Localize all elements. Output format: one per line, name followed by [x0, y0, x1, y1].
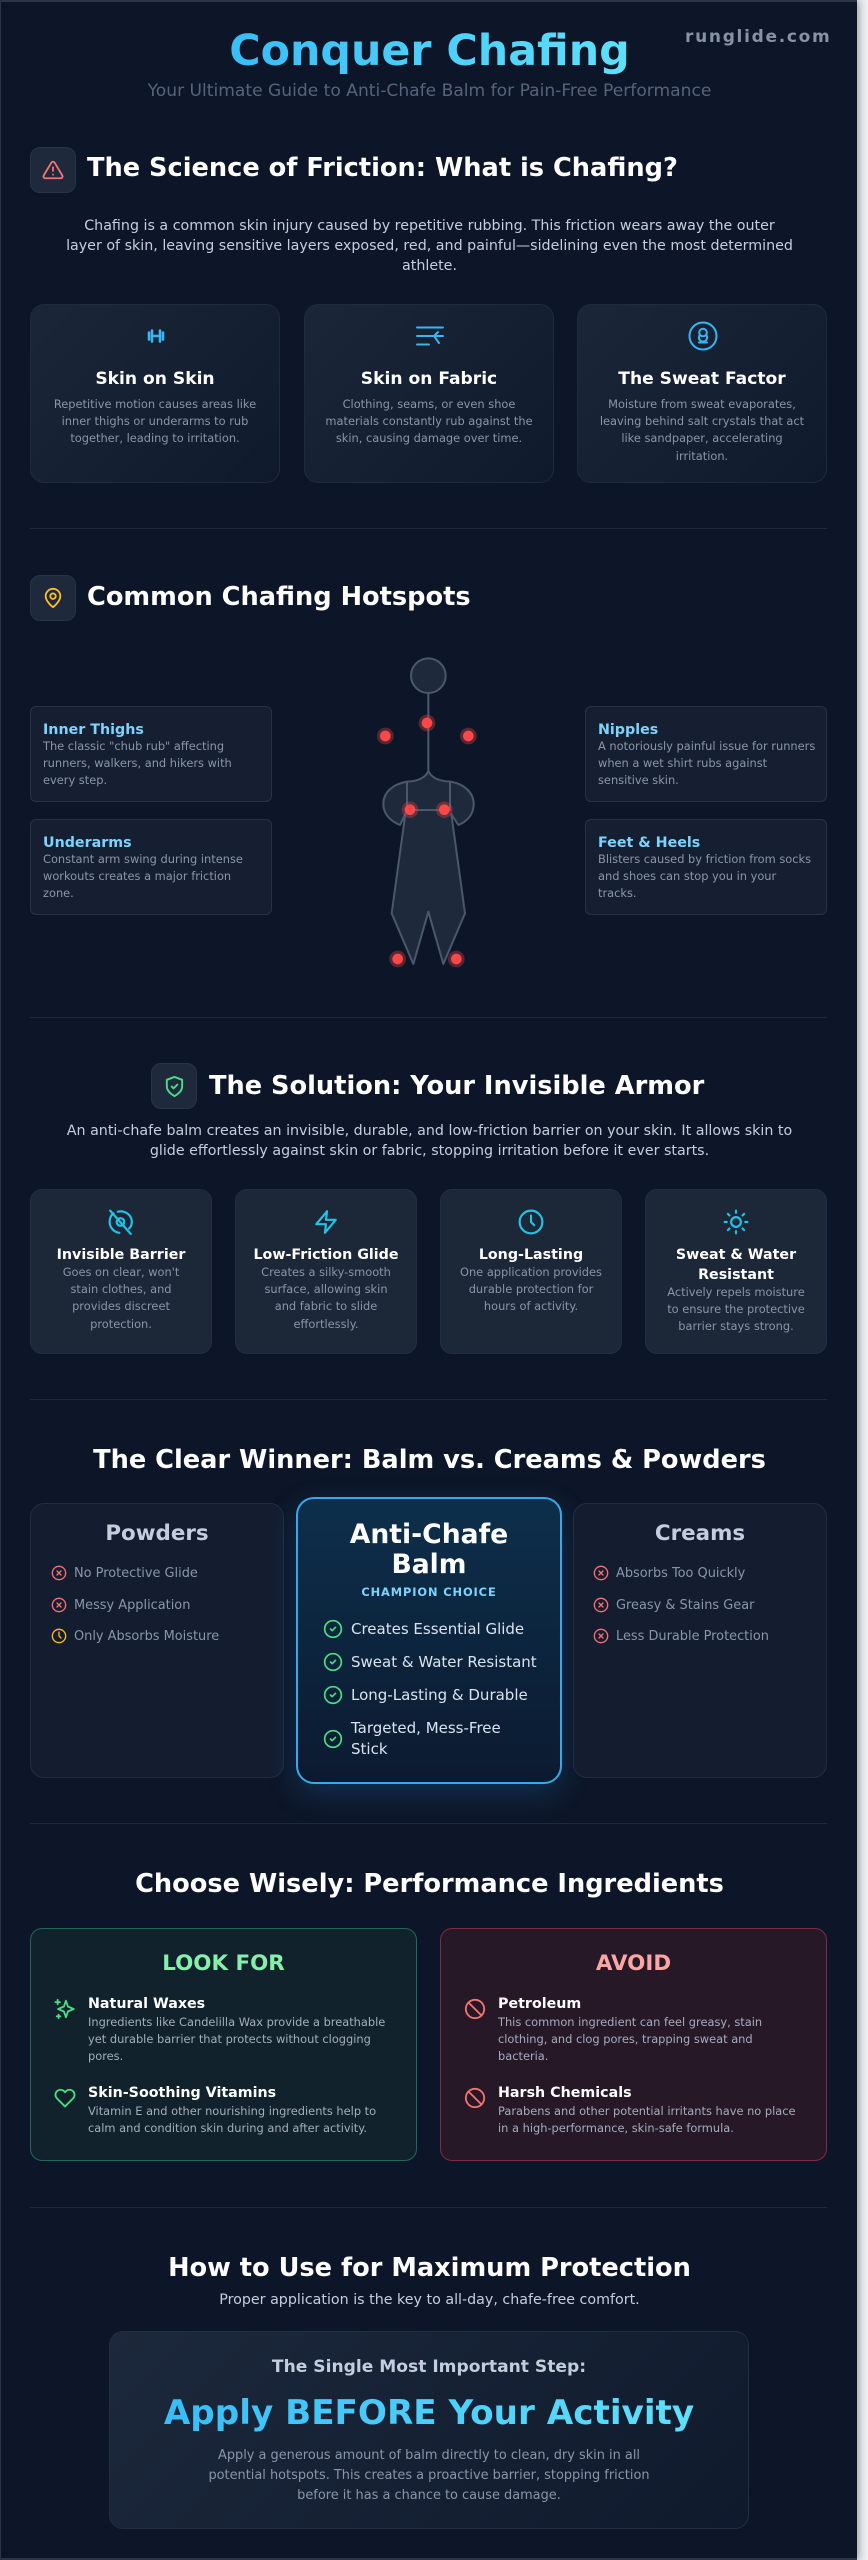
icon: eye off: [108, 1210, 133, 1235]
hotspot description: zone.: [43, 886, 74, 900]
ingredient title: Skin-Soothing Vitamins: [88, 2084, 276, 2100]
row: sweat and water resistant: Sweat & Water Resistant: [351, 1653, 537, 1671]
ingredient description: clothing, and clog pores, trapping sweat and: [498, 2032, 753, 2046]
step label: The Single Most Important Step:: [272, 2357, 586, 2377]
icon: warning triangle: [30, 147, 76, 193]
icon: clock: [518, 1210, 544, 1234]
card: invisible barrier: [30, 1189, 212, 1354]
ingredient description: pores.: [88, 2049, 123, 2063]
ingredient description: [88, 2104, 376, 2135]
card description: skin, causing damage over time.: [336, 431, 522, 445]
panel title: Creams: [655, 1521, 745, 1546]
panel: powders: [30, 1503, 284, 1778]
panel: creams: [573, 1503, 827, 1778]
intro paragraph: layer of skin, leaving sensitive layers exposed, red, and painful—sidelining even the most determined: [66, 238, 793, 254]
solution paragraph: [66, 1123, 792, 1159]
panel title: [350, 1519, 508, 1580]
panel title: Powders: [105, 1521, 209, 1546]
card title: Low-Friction Glide: [253, 1247, 399, 1263]
heading: hotspots: Common Chafing Hotspots: [87, 582, 471, 612]
solution paragraph: glide effortlessly against skin or fabric, stopping irritation before it ever starts.: [150, 1143, 709, 1159]
ingredient: harsh chemicals: [498, 2082, 796, 2137]
card: the sweat factor: [577, 304, 827, 483]
row: absorbs too quickly: Absorbs Too Quickly: [616, 1566, 745, 1580]
icon: ban: [464, 2086, 486, 2108]
hotspot description: tracks.: [598, 886, 637, 900]
subheading: Proper application is the key to all-day, chafe-free comfort.: [219, 2292, 640, 2308]
card title: [676, 1247, 796, 1283]
hotspot markers: [377, 715, 477, 967]
ingredient description: in a high-performance, skin-safe formula.: [498, 2121, 734, 2135]
hotspot card: underarms: [30, 819, 272, 915]
ingredient description: This common ingredient can feel greasy, stain: [498, 2015, 762, 2029]
card: skin on skin: [30, 304, 280, 483]
intro paragraph: Chafing is a common skin injury caused by repetitive rubbing. This friction wears away the outer: [84, 218, 775, 234]
watermark: runglide.com: [685, 27, 831, 47]
card title: Long-Lasting: [479, 1247, 583, 1263]
ingredient description: Vitamin E and other nourishing ingredients help to: [88, 2104, 376, 2118]
hotspot description: [598, 852, 811, 900]
card description: One application provides: [460, 1265, 602, 1279]
card description: [667, 1285, 805, 1333]
card title: Resistant: [698, 1267, 774, 1283]
icon: dumbbell: [148, 329, 164, 343]
hotspot description: [43, 739, 232, 787]
icon: sweat droplets: [688, 322, 718, 350]
card description: irritation.: [676, 449, 728, 463]
card description: surface, allowing skin: [264, 1282, 388, 1296]
panel: most important step: [109, 2331, 749, 2529]
panel title: LOOK FOR: [162, 1951, 285, 1976]
card description: Actively repels moisture: [667, 1285, 805, 1299]
hotspot description: runners, walkers, and hikers with: [43, 756, 232, 770]
ingredient: skin-soothing vitamins: [88, 2084, 376, 2135]
step description: [110, 2446, 748, 2506]
row: targeted, mess-free stick: Stick: [351, 1740, 388, 1758]
row: only absorbs moisture: Only Absorbs Moisture: [74, 1628, 219, 1644]
solution paragraph: An anti-chafe balm creates an invisible, durable, and low-friction barrier on your skin. It allows skin to: [67, 1123, 792, 1139]
row: greasy and stains gear: Greasy & Stains Gear: [616, 1598, 754, 1612]
card description: [600, 397, 804, 463]
card title: Skin on Skin: [95, 369, 215, 389]
panel title: Balm: [391, 1549, 467, 1580]
hotspot card: nipples: [585, 706, 827, 802]
row: less durable protection: Less Durable Protection: [616, 1628, 769, 1644]
card description: materials constantly rub against the: [325, 414, 533, 428]
card description: Repetitive motion causes areas like: [54, 397, 256, 411]
icon: map pin: [30, 575, 76, 621]
card: long-lasting: [440, 1189, 622, 1354]
row: messy application: Messy Application: [74, 1598, 190, 1612]
body diagram with hotspots: [377, 657, 477, 968]
card description: [261, 1265, 391, 1331]
figure outline: [383, 658, 474, 964]
hotspot description: and shoes can stop you in your: [598, 869, 776, 883]
step description: before it has a chance to cause damage.: [297, 2488, 561, 2503]
intro paragraph: athlete.: [402, 258, 457, 274]
ingredient title: Natural Waxes: [88, 1996, 205, 2012]
card description: Moisture from sweat evaporates,: [608, 397, 796, 411]
hotspot description: when a wet shirt rubs against: [598, 756, 767, 770]
panel: look for: [30, 1928, 417, 2161]
ingredient title: Petroleum: [498, 1996, 581, 2012]
panel: anti-chafe balm: [296, 1497, 562, 1784]
card description: to ensure the protective: [667, 1302, 805, 1316]
ingredient description: [498, 2102, 796, 2137]
card title: Skin on Fabric: [361, 369, 497, 389]
ingredient: petroleum: [498, 1994, 762, 2066]
row: long-lasting and durable: Long-Lasting & Durable: [351, 1686, 528, 1704]
ingredient description: [498, 2014, 762, 2066]
subtitle: Your Ultimate Guide to Anti-Chafe Balm for Pain-Free Performance: [148, 81, 711, 101]
hotspot description: workouts creates a major friction: [43, 869, 231, 883]
icon: shield check: [151, 1063, 197, 1109]
ingredient description: bacteria.: [498, 2049, 548, 2063]
card description: Creates a silky-smooth: [261, 1265, 391, 1279]
card: low-friction glide: [235, 1189, 417, 1354]
hotspot description: every step.: [43, 773, 107, 787]
card description: leaving behind salt crystals that act: [600, 414, 804, 428]
card description: provides discreet: [72, 1299, 170, 1313]
heading: how to use: How to Use for Maximum Protection: [168, 2253, 691, 2283]
hotspot title: Nipples: [598, 722, 658, 738]
champion label: CHAMPION CHOICE: [361, 1585, 497, 1599]
panel: avoid: [440, 1928, 827, 2161]
card description: durable protection for: [469, 1282, 593, 1296]
hotspot description: Blisters caused by friction from socks: [598, 852, 811, 866]
ingredient description: calm and condition skin during and after activity.: [88, 2121, 367, 2135]
card description: and fabric to slide: [275, 1299, 377, 1313]
ingredient description: Parabens and other potential irritants have no place: [498, 2104, 796, 2118]
card description: effortlessly.: [294, 1317, 358, 1331]
row: no protective glide: No Protective Glide: [74, 1566, 198, 1580]
step description: potential hotspots. This creates a proactive barrier, stopping friction: [208, 2468, 650, 2483]
icon: sparkles: [54, 1998, 75, 2020]
hotspot description: sensitive skin.: [598, 773, 679, 787]
ingredient description: Ingredients like Candelilla Wax provide a breathable: [88, 2015, 385, 2029]
card description: hours of activity.: [484, 1299, 578, 1313]
ingredient description: [88, 2015, 385, 2063]
heading: choose wisely: Choose Wisely: Performance Ingredients: [135, 1869, 724, 1899]
hotspot title: Underarms: [43, 835, 132, 851]
intro paragraph: [66, 218, 793, 274]
icon: lightning bolt: [315, 1210, 337, 1234]
hotspot card: feet and heels: [585, 819, 827, 915]
hotspot description: A notoriously painful issue for runners: [598, 739, 815, 753]
row: targeted, mess-free stick: [324, 1719, 501, 1758]
hotspot description: The classic "chub rub" affecting: [43, 739, 224, 753]
panel title: Anti-Chafe: [350, 1519, 508, 1550]
heading: the solution: The Solution: Your Invisible Armor: [209, 1071, 704, 1101]
hotspot description: [598, 739, 815, 787]
card description: like sandpaper, accelerating: [621, 431, 783, 445]
card description: inner thighs or underarms to rub: [62, 414, 248, 428]
card description: protection.: [90, 1317, 152, 1331]
card title: The Sweat Factor: [618, 369, 786, 389]
heading: the clear winner: The Clear Winner: Balm vs. Creams & Powders: [93, 1445, 766, 1475]
step description: Apply a generous amount of balm directly to clean, dry skin in all: [218, 2448, 640, 2463]
hotspot card: inner thighs: [30, 706, 272, 802]
card description: [460, 1265, 602, 1313]
card description: barrier stays strong.: [678, 1319, 794, 1333]
card description: [325, 397, 533, 445]
hotspot description: Constant arm swing during intense: [43, 852, 243, 866]
row: targeted, mess-free stick: Targeted, Mess-Free: [351, 1719, 501, 1737]
card description: stain clothes, and: [70, 1282, 172, 1296]
card description: Clothing, seams, or even shoe: [343, 397, 515, 411]
ingredient title: Harsh Chemicals: [498, 2084, 632, 2100]
card: skin on fabric: [304, 304, 554, 483]
hotspot title: Inner Thighs: [43, 722, 144, 738]
ingredient: natural waxes: [88, 1996, 385, 2063]
heading: science of friction: The Science of Friction: What is Chafing?: [87, 153, 678, 183]
icon: fabric lines: [416, 326, 444, 346]
icon: heart: [54, 2088, 76, 2108]
card description: [54, 397, 256, 445]
panel title: AVOID: [596, 1951, 671, 1976]
hotspot title: Feet & Heels: [598, 835, 700, 851]
ingredient description: yet durable barrier that protects without clogging: [88, 2032, 371, 2046]
card description: together, leading to irritation.: [70, 431, 240, 445]
hotspot description: [43, 852, 243, 900]
card description: Goes on clear, won't: [63, 1265, 179, 1279]
card description: [63, 1265, 180, 1331]
card title: Invisible Barrier: [57, 1247, 185, 1263]
icon: sun: [724, 1210, 748, 1234]
card title: Sweat & Water: [676, 1247, 796, 1263]
title: Conquer Chafing: [229, 26, 630, 76]
row: creates essential glide: Creates Essential Glide: [351, 1620, 524, 1638]
card: sweat and water resistant: [645, 1189, 827, 1354]
icon: ban: [464, 1998, 486, 2020]
call to action: Apply BEFORE Your Activity: [164, 2393, 694, 2433]
